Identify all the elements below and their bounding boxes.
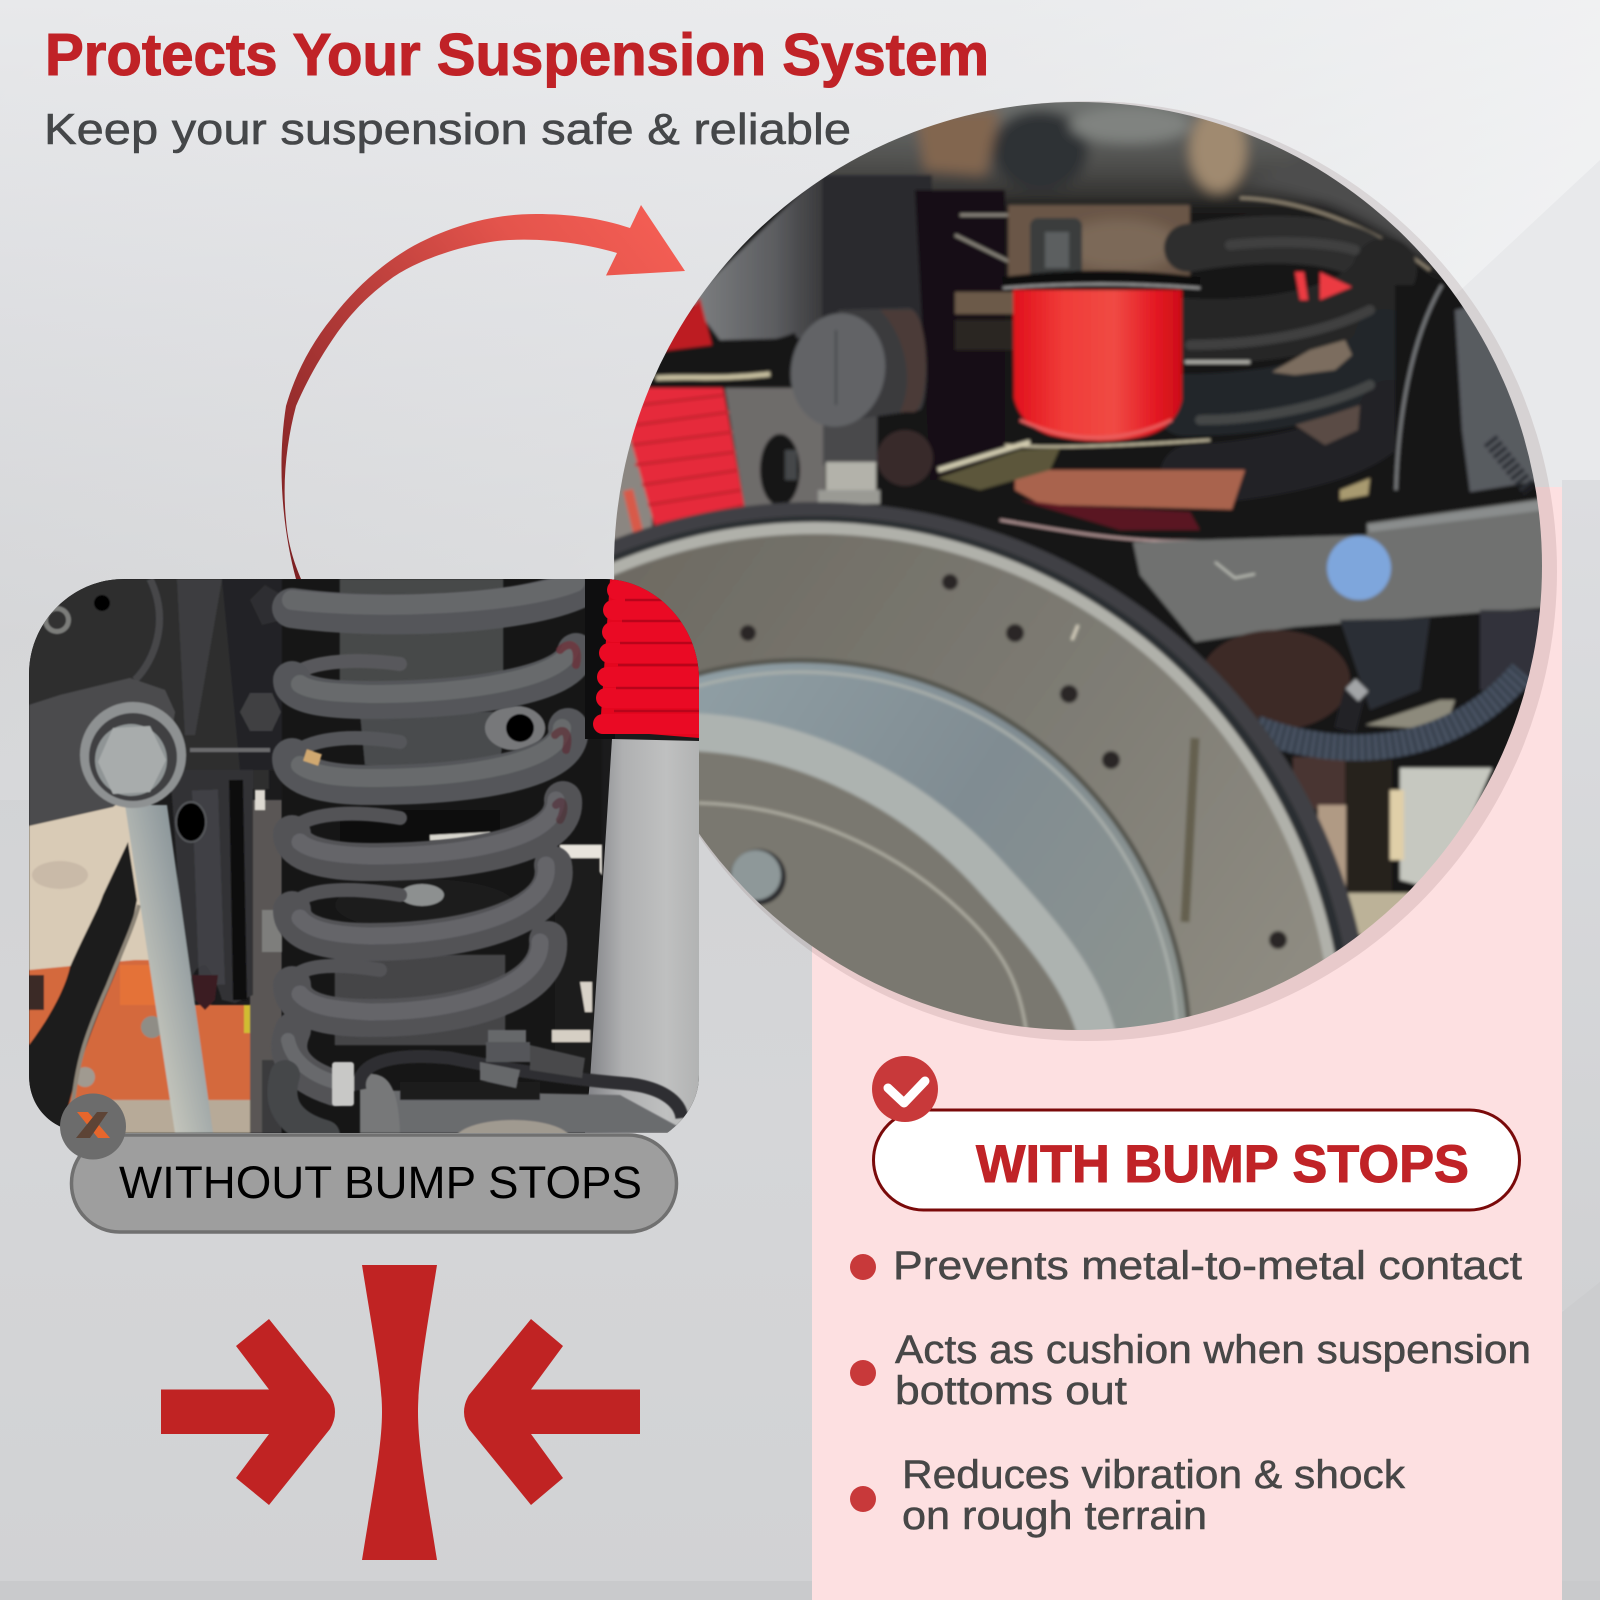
shock body: [585, 739, 699, 1133]
coil spring: [1185, 240, 1390, 475]
photo ring shadow: [617, 101, 1557, 1041]
bullet 3: [850, 1453, 1406, 1538]
orange jack: [29, 959, 252, 1106]
photo: suspension with bump stop in circle: [614, 102, 1542, 1030]
icon: x badge: [60, 1094, 126, 1160]
bullet 3: Reduces vibration & shock: [902, 1453, 1406, 1497]
blue dot: [1327, 536, 1391, 600]
red glimpse: [1295, 272, 1352, 300]
bullet 2: bottoms out: [895, 1369, 1127, 1413]
bullet 2: Acts as cushion when suspension: [895, 1328, 1531, 1372]
arrow: curved red arrow: [281, 205, 685, 579]
bracket plate: [29, 579, 283, 1133]
left red bellows: [612, 298, 745, 560]
arm: [1133, 498, 1550, 642]
axle housing: [826, 102, 1439, 275]
round eye bolt: [80, 702, 186, 808]
panel: with bump stops background: [812, 487, 1562, 1600]
label pill: without bump stops: WITHOUT BUMP STOPS: [119, 1157, 642, 1208]
black hose: [29, 842, 137, 1133]
bullet 2: [850, 1328, 1531, 1413]
tan gaps: [1272, 340, 1352, 375]
arm plate: [29, 678, 175, 826]
bullet 1: Prevents metal-to-metal contact: [893, 1244, 1522, 1288]
photo: suspension without bump stop: [29, 579, 699, 1160]
column behind coils: [250, 800, 282, 1133]
link rod: [125, 805, 213, 1133]
title: Protects Your Suspension System: [45, 22, 989, 88]
subtitle: Keep your suspension safe & reliable: [44, 105, 851, 154]
plank: [1015, 470, 1245, 515]
lower right cluster: [1200, 610, 1540, 935]
backdrop lower left beige: [29, 805, 159, 1005]
bracket vertical: [170, 770, 253, 1003]
bush: [782, 306, 933, 504]
friction band highlight: [699, 750, 1076, 1030]
bracket plate with slot: [725, 388, 825, 510]
label pill: with bump stops: WITH BUMP STOPS: [976, 1135, 1469, 1194]
rotor disc: [614, 519, 1337, 1030]
icon: compression arrows: [161, 1265, 640, 1560]
spring coils: [282, 582, 580, 1135]
rotor outer seal ring: [614, 500, 1360, 947]
red bellows: [585, 579, 699, 739]
black bar: [778, 332, 798, 341]
icon: check badge: [872, 1056, 938, 1122]
lower hub and wire: [331, 1029, 688, 1133]
gray fender shape: [694, 186, 824, 342]
central shaft and inner spring: [282, 579, 602, 1139]
label pill: with bump stops: [874, 1110, 1520, 1210]
moss line: [938, 448, 1060, 490]
bullet 3: on rough terrain: [902, 1494, 1207, 1538]
right dark column and hose: [1394, 285, 1420, 444]
bracket on top of cup: [1030, 218, 1082, 280]
upper mount rust block: [1008, 205, 1190, 280]
red cup: [1003, 276, 1210, 447]
label pill: without bump stops: [72, 1135, 676, 1232]
hex bolt: [240, 693, 281, 731]
